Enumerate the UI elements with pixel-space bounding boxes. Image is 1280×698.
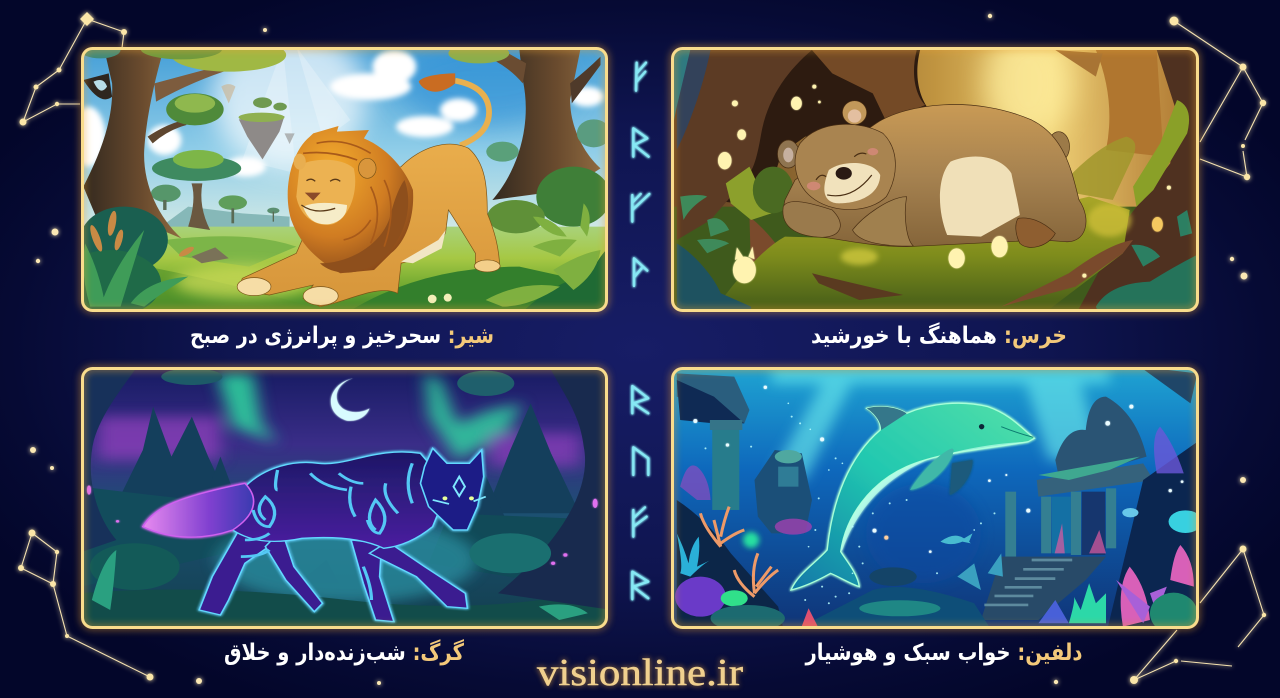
bear (777, 101, 1086, 247)
leaves (677, 195, 1200, 315)
runes: top column (632, 63, 649, 286)
glowing markings (241, 463, 412, 600)
wolf legs (199, 527, 467, 622)
wolf scene (78, 363, 612, 633)
constellation: bottom right (1130, 546, 1266, 684)
panel: lion (60, 23, 611, 349)
small fish (940, 533, 973, 544)
right tree (448, 43, 611, 233)
right corals (798, 367, 1202, 635)
panel: dolphin (670, 360, 1202, 666)
crescent moon (331, 378, 369, 421)
caption: bear: خرس: هماهنگ با خورشید (811, 322, 1067, 349)
caption: dolphin: دلفین: خواب سبک و هوشیار (805, 640, 1083, 666)
framing trees (78, 368, 612, 610)
glowing spirits (718, 85, 1171, 283)
runes: bottom column (632, 386, 648, 599)
dolphin scene (670, 360, 1202, 635)
constellation: top left (20, 12, 127, 126)
logo text: visionline.ir (537, 652, 743, 694)
right ruins (981, 397, 1153, 620)
wolf frame (82, 368, 606, 628)
bear frame (672, 48, 1198, 310)
left tree (80, 38, 286, 238)
wolf (143, 448, 484, 622)
pines (86, 404, 574, 559)
sparkles (693, 386, 1183, 553)
caption: lion: شیر: سحرخیز و پرانرژی در صبح (190, 323, 494, 349)
panel: bear (670, 27, 1200, 349)
dolphin (791, 403, 1034, 590)
dark seabed (814, 587, 988, 626)
constellation: bottom left (18, 530, 154, 680)
caption: wolf: گرگ: شب‌زنده‌دار و خلاق (224, 639, 465, 666)
left ruins (677, 373, 812, 533)
bear scene (674, 50, 1196, 309)
floating island (221, 84, 295, 159)
foreground foliage (84, 204, 605, 309)
lion frame (82, 48, 606, 310)
wolf torso (233, 452, 449, 548)
lion scene (84, 50, 605, 309)
left corals (675, 465, 812, 635)
constellation: top right (1170, 16, 1266, 180)
mossy ground (726, 196, 1130, 306)
tree and hollow (673, 50, 1200, 315)
lion (237, 73, 500, 307)
far trees (151, 150, 279, 230)
wolf head (420, 448, 484, 530)
panel: wolf (78, 363, 612, 666)
aurora (98, 373, 580, 467)
dolphin frame (672, 368, 1198, 628)
